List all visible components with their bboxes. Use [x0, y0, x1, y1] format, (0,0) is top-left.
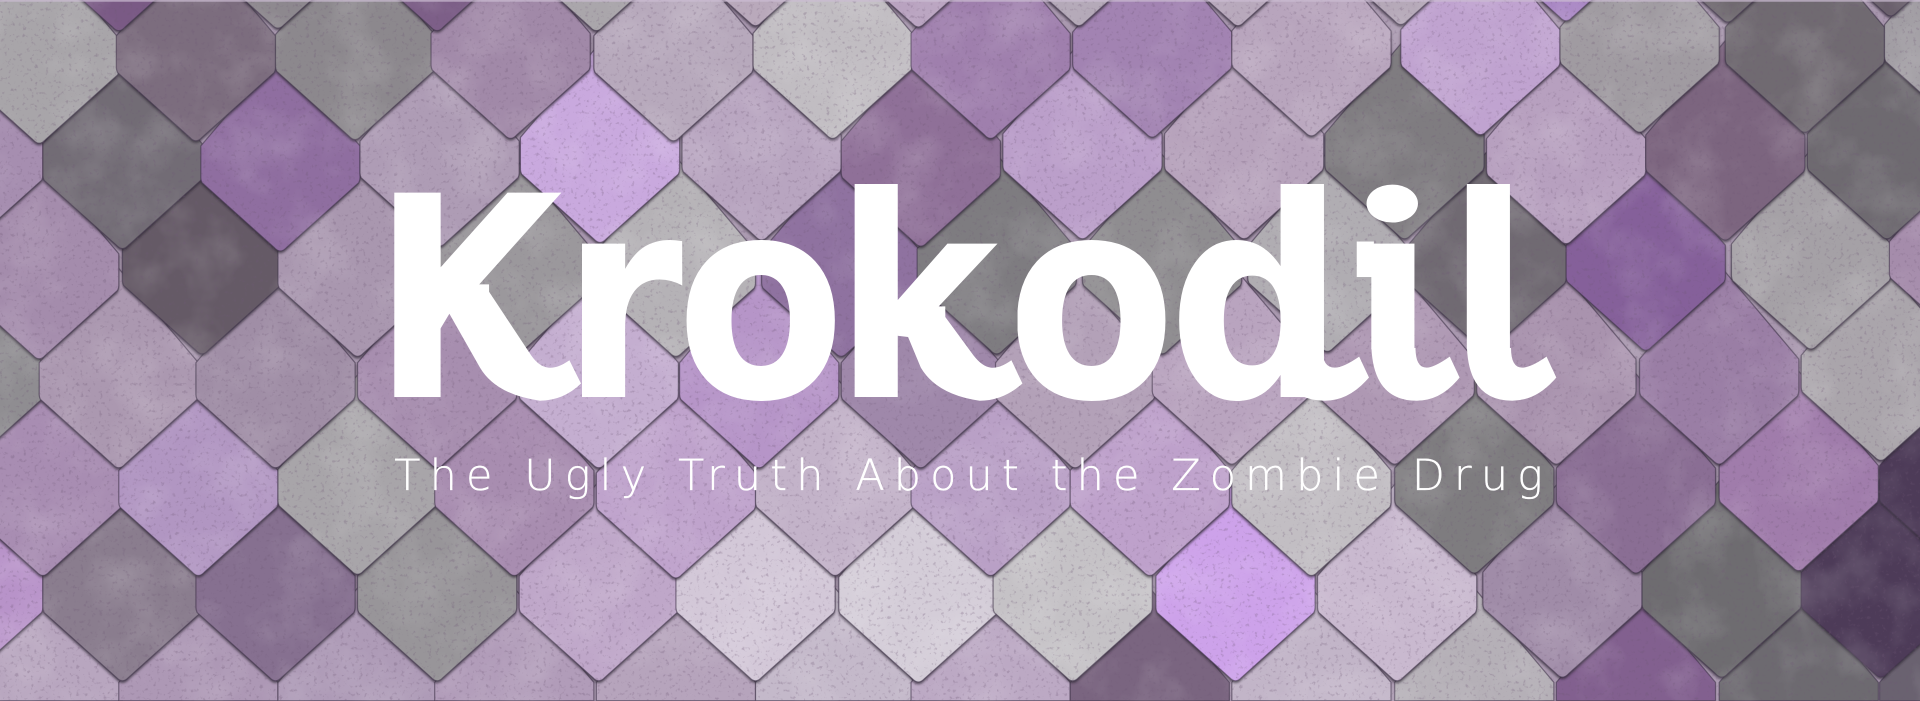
subtitle: The Ugly Truth About the Zombie Drug [394, 451, 1543, 501]
title: Krokodil: Krokodil [372, 138, 1531, 464]
tile row G [0, 478, 1920, 682]
tile row H [0, 588, 1920, 701]
tile row C [0, 39, 1920, 251]
tile row B [0, 0, 1920, 143]
tile row A [0, 0, 1920, 31]
tile row F [0, 371, 1920, 578]
tile row E [0, 261, 1920, 468]
tile row D [0, 147, 1920, 359]
title: Krokodil [394, 184, 1556, 401]
